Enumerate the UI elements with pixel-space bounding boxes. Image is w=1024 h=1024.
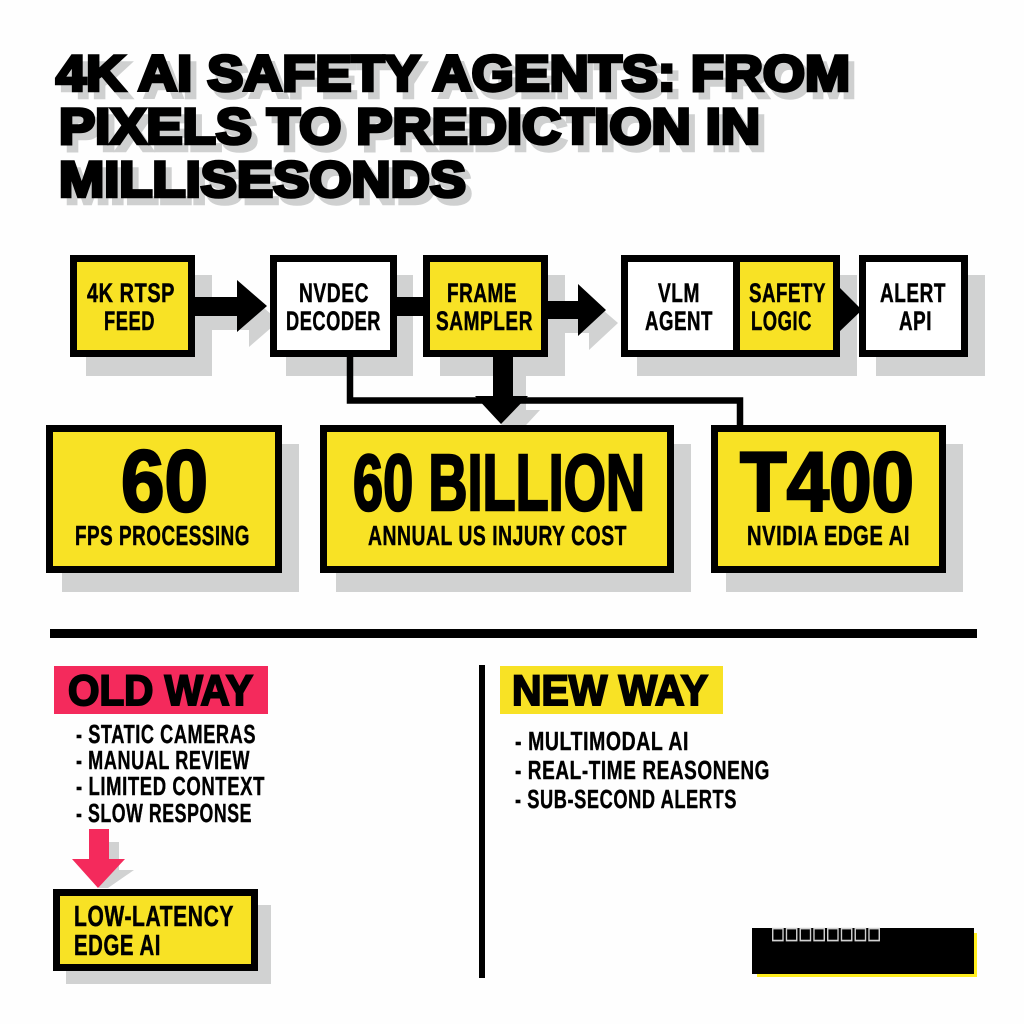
box: alert API: ALERT bbox=[880, 278, 946, 308]
box: 4K RTSP feed bbox=[74, 258, 192, 354]
box: VLM agent and safety logic: VLM bbox=[658, 278, 700, 308]
drop shadows bbox=[62, 275, 985, 984]
list: old way: - LIMITED CONTEXT bbox=[76, 773, 265, 801]
title: MILLISESONDS bbox=[59, 152, 466, 208]
box: NVDEC decoder: NVDEC bbox=[299, 278, 369, 308]
list: old way: - STATIC CAMERAS bbox=[76, 721, 256, 749]
title: 4K AI SAFETY AGENTS: FROM bbox=[56, 46, 850, 102]
box: VLM agent and safety logic: SAFETY bbox=[749, 278, 826, 308]
stat: 60 billion: ANNUAL US INJURY COST bbox=[368, 520, 627, 551]
box: frame sampler: SAMPLER bbox=[436, 306, 533, 336]
box: low-latency edge AI: EDGE AI bbox=[74, 930, 161, 962]
connector lines bbox=[350, 357, 740, 428]
stat: 60 FPS: 60 bbox=[121, 433, 208, 530]
box: 4K RTSP feed: 4K RTSP bbox=[87, 278, 175, 308]
heading: old way: OLD WAY bbox=[68, 667, 253, 715]
list: new way: - MULTIMODAL AI bbox=[515, 728, 689, 756]
list: new way bbox=[515, 728, 770, 814]
box: VLM agent and safety logic: AGENT bbox=[645, 306, 713, 336]
box: low-latency edge AI bbox=[56, 892, 254, 968]
stat: T400: T400 bbox=[740, 435, 914, 529]
box: alert API bbox=[862, 258, 964, 354]
stat: 60 billion bbox=[324, 428, 670, 570]
box: frame sampler: FRAME bbox=[447, 278, 517, 308]
box: 4K RTSP feed: FEED bbox=[104, 306, 155, 336]
black footer tag bbox=[752, 924, 977, 977]
stat: 60 billion: 60 BILLION bbox=[353, 438, 645, 527]
list: old way: - MANUAL REVIEW bbox=[76, 747, 250, 775]
black footer tag: □□□□□□□□ bbox=[771, 924, 881, 944]
arrow: RTSP feed to decoder bbox=[195, 280, 267, 332]
stat: 60 FPS bbox=[50, 428, 278, 570]
arrow: old way down to edge AI bbox=[72, 829, 125, 888]
box: NVDEC decoder bbox=[274, 258, 394, 354]
list: new way: - SUB-SECOND ALERTS bbox=[515, 786, 737, 814]
list: new way: - REAL-TIME REASONENG bbox=[515, 757, 770, 785]
arrow: safety logic to alert API bbox=[838, 286, 862, 333]
box: NVDEC decoder: DECODER bbox=[286, 306, 381, 336]
title: PIXELS TO PREDICTION IN bbox=[59, 98, 760, 154]
list: old way: - SLOW RESPONSE bbox=[76, 800, 252, 828]
box: frame sampler bbox=[426, 258, 544, 354]
list: old way bbox=[76, 721, 265, 828]
stat: T400: NVIDIA EDGE AI bbox=[747, 520, 910, 551]
box: low-latency edge AI: LOW-LATENCY bbox=[74, 901, 234, 933]
box: VLM agent and safety logic: LOGIC bbox=[751, 306, 812, 336]
stat: 60 FPS: FPS PROCESSING bbox=[75, 520, 250, 551]
connector: decoder to sampler bbox=[397, 297, 423, 316]
arrow: sampler down to stats bbox=[475, 357, 528, 424]
box: VLM agent and safety logic bbox=[624, 258, 836, 354]
title bbox=[56, 46, 850, 208]
box: alert API: API bbox=[899, 306, 932, 336]
heading: new way: NEW WAY bbox=[512, 667, 708, 715]
arrow: sampler to VLM agent bbox=[548, 284, 606, 336]
stat: T400 bbox=[714, 428, 942, 570]
